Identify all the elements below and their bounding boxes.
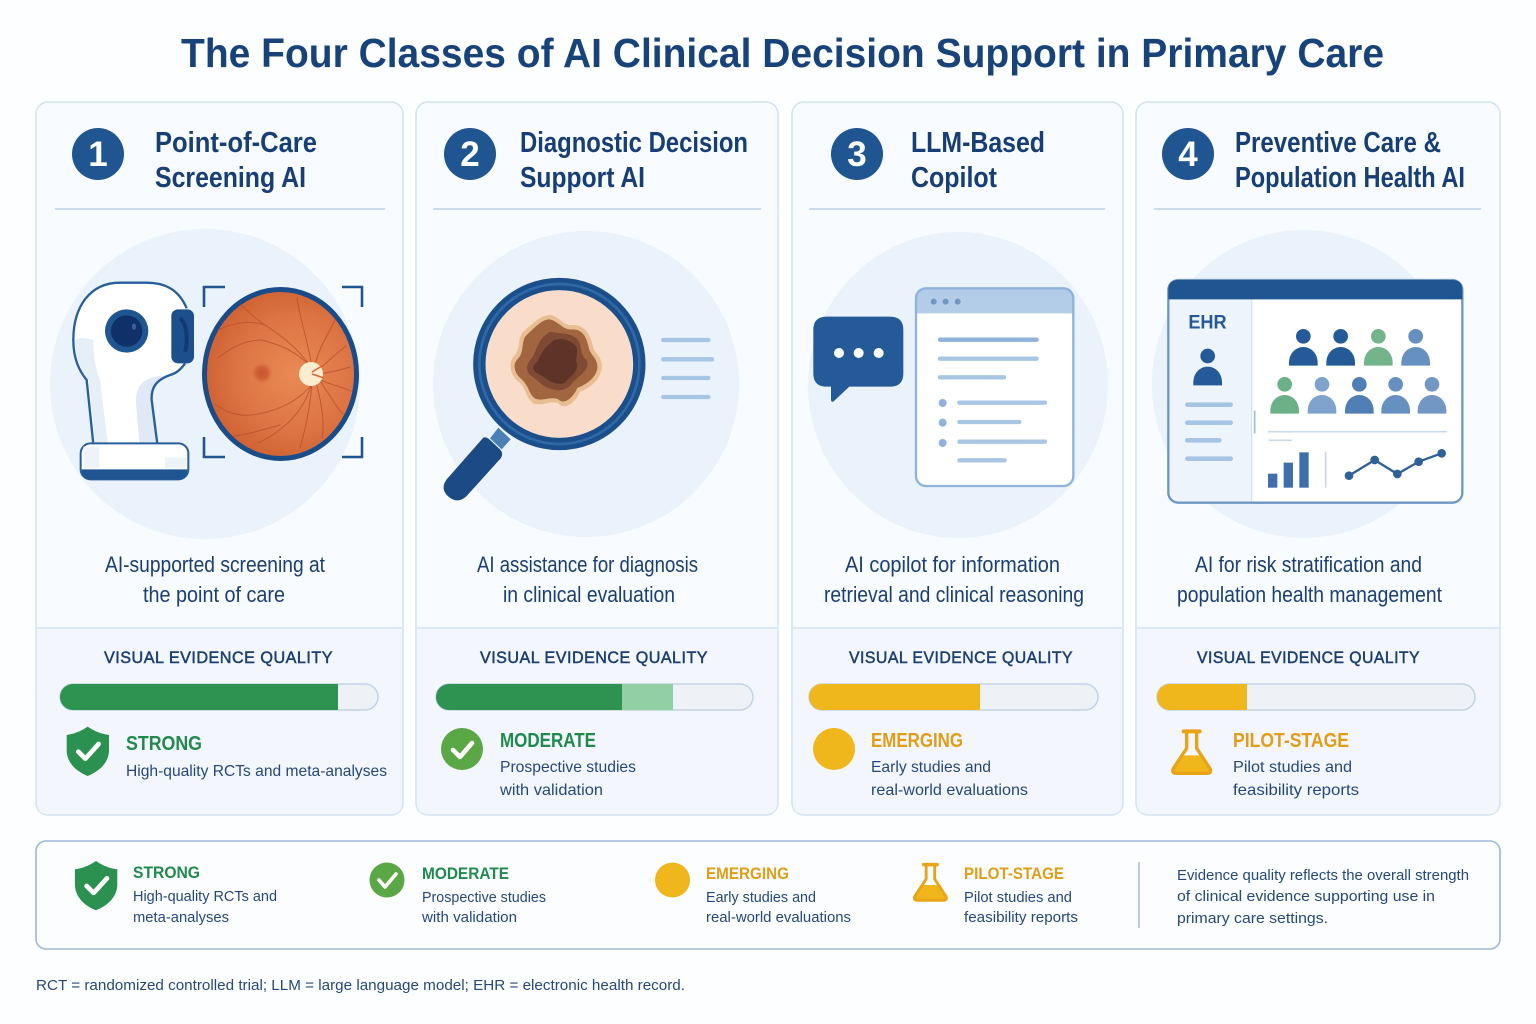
legend text: pilot-stage: Pilot studies and <box>964 889 1072 906</box>
icon: check circle <box>441 728 483 770</box>
legend text: strong: High-quality RCTs and <box>133 888 277 905</box>
title: The Four Classes of AI Clinical Decision Support in Primary Care <box>181 30 1384 76</box>
legend icon: strong <box>75 861 117 910</box>
legend note: Evidence quality reflects the overall strength <box>1177 867 1469 884</box>
legend icon: pilot-stage <box>914 865 947 900</box>
line chart <box>1345 449 1446 480</box>
evidence text: PILOT-STAGE <box>1233 730 1349 752</box>
description <box>105 552 325 607</box>
heading <box>155 127 317 194</box>
legend text: moderate <box>421 864 546 926</box>
legend icon: moderate <box>370 862 404 898</box>
description <box>824 552 1084 607</box>
evidence text: Prospective studies <box>500 759 636 776</box>
legend icon: emerging <box>655 862 690 898</box>
bar chart <box>1268 452 1309 488</box>
description <box>477 552 698 607</box>
evidence text: MODERATE <box>500 730 596 752</box>
legend text: moderate: Prospective studies <box>422 889 546 906</box>
panel: diagnostic decision support AI <box>416 102 778 815</box>
description: population health management <box>1177 582 1442 607</box>
description <box>1177 552 1442 607</box>
illustration: retinal camera <box>73 283 194 479</box>
number badge 2: 2 <box>460 135 480 174</box>
legend text: moderate: MODERATE <box>422 864 509 883</box>
legend text: emerging: real-world evaluations <box>706 909 851 926</box>
icon: shield check <box>67 727 109 776</box>
legend text: emerging <box>706 864 851 926</box>
heading: Support AI <box>520 162 645 194</box>
evidence text: STRONG <box>126 733 202 755</box>
evidence bar: moderate <box>436 684 753 710</box>
number badge 4 <box>1162 128 1214 180</box>
heading: Screening AI <box>155 162 306 194</box>
legend note: of clinical evidence supporting use in <box>1177 888 1435 905</box>
description: AI-supported screening at <box>105 552 325 577</box>
heading <box>520 127 748 194</box>
legend text: emerging: Early studies and <box>706 889 816 906</box>
illustration: EHR population dashboard <box>1168 280 1462 503</box>
evidence text <box>126 733 387 780</box>
legend text: strong <box>133 863 277 926</box>
legend text: moderate: with validation <box>421 909 517 926</box>
evidence text <box>1233 730 1359 799</box>
evidence bar: pilot-stage <box>1157 684 1475 710</box>
evidence text: Early studies and <box>871 759 991 776</box>
description: retrieval and clinical reasoning <box>824 582 1084 607</box>
heading: Population Health AI <box>1235 162 1465 194</box>
evidence text: EMERGING <box>871 730 963 752</box>
heading: Point-of-Care <box>155 127 317 159</box>
description: AI assistance for diagnosis <box>477 552 698 577</box>
evidence text: real-world evaluations <box>871 782 1028 799</box>
evidence text <box>499 730 636 799</box>
number badge 3: 3 <box>847 135 867 174</box>
heading <box>911 127 1045 194</box>
panel: point-of-care screening AI <box>36 102 403 815</box>
evidence label: VISUAL EVIDENCE QUALITY <box>104 648 333 667</box>
description: AI for risk stratification and <box>1195 552 1422 577</box>
number badge 2 <box>444 128 496 180</box>
icon: flask <box>1173 731 1211 773</box>
evidence label: VISUAL EVIDENCE QUALITY <box>480 648 708 667</box>
number badge 4: 4 <box>1178 135 1198 174</box>
evidence text <box>871 730 1028 799</box>
evidence text: Pilot studies and <box>1233 759 1352 776</box>
footnote: RCT = randomized controlled trial; LLM = large language model; EHR = electronic health record. <box>36 977 685 994</box>
population icons <box>1270 329 1446 414</box>
legend text: pilot-stage: PILOT-STAGE <box>964 864 1064 883</box>
heading <box>1235 127 1465 194</box>
patient icon <box>1193 349 1222 385</box>
heading: Preventive Care & <box>1235 127 1441 159</box>
EHR label: EHR <box>1188 312 1227 333</box>
evidence text: High-quality RCTs and meta-analyses <box>126 763 387 780</box>
heading: LLM-Based <box>911 127 1045 159</box>
legend note <box>1177 867 1469 927</box>
legend text: strong: meta-analyses <box>133 909 229 926</box>
number badge 1: 1 <box>88 135 108 174</box>
evidence text: with validation <box>499 782 603 799</box>
legend text: pilot-stage: feasibility reports <box>964 909 1078 926</box>
evidence label: VISUAL EVIDENCE QUALITY <box>849 648 1073 667</box>
number badge 1 <box>72 128 124 180</box>
description: the point of care <box>143 582 285 607</box>
evidence bar: emerging <box>809 684 1098 710</box>
description: in clinical evaluation <box>503 582 675 607</box>
panel: LLM-based copilot <box>792 102 1123 815</box>
description: AI copilot for information <box>845 552 1060 577</box>
heading: Diagnostic Decision <box>520 127 748 159</box>
illustration: retina fundus image <box>204 287 362 458</box>
legend note: primary care settings. <box>1177 910 1328 927</box>
evidence label: VISUAL EVIDENCE QUALITY <box>1197 648 1420 667</box>
legend text: emerging: EMERGING <box>706 864 789 883</box>
legend text: strong: STRONG <box>133 863 200 882</box>
panel: legend <box>36 841 1500 949</box>
number badge 3 <box>831 128 883 180</box>
legend text: pilot-stage <box>964 864 1078 926</box>
illustration: magnifier over skin lesion <box>444 284 712 500</box>
panel: preventive care and population health AI <box>1136 102 1500 815</box>
evidence bar: strong <box>60 684 378 710</box>
heading: Copilot <box>911 162 997 194</box>
icon: amber circle <box>813 728 855 770</box>
illustration: chat bubble and document window <box>813 288 1073 486</box>
evidence text: feasibility reports <box>1233 782 1359 799</box>
